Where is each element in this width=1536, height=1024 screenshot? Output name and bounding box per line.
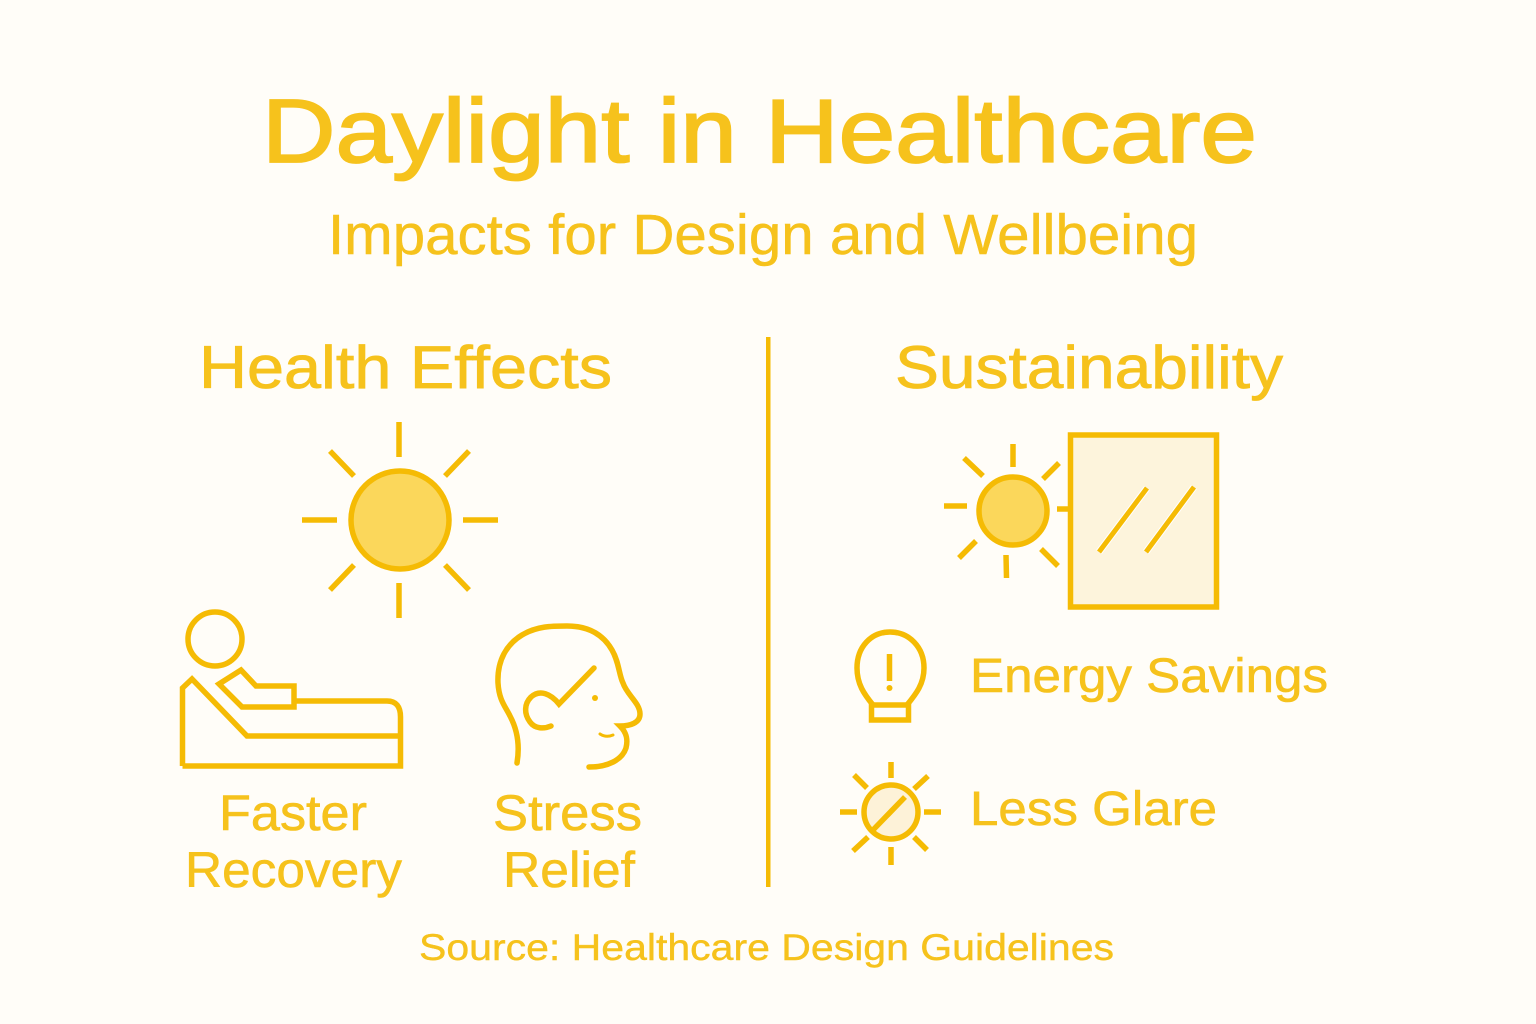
label: Stress Relief bbox=[493, 785, 642, 898]
label: Less Glare: Less Glare bbox=[970, 783, 1217, 836]
label: Stress Relief: Stress bbox=[493, 785, 642, 841]
source note: Source: Healthcare Design Guidelines bbox=[419, 927, 1114, 968]
icon: light bulb bbox=[857, 632, 924, 720]
divider line bbox=[766, 337, 770, 887]
label: Faster Recovery: Faster bbox=[219, 785, 367, 841]
subtitle: Impacts for Design and Wellbeing bbox=[328, 203, 1198, 267]
label: Faster Recovery: Recovery bbox=[185, 842, 402, 898]
icon: patient in bed bbox=[182, 612, 400, 766]
label: Energy Savings: Energy Savings bbox=[970, 650, 1328, 703]
heading: Sustainability: Sustainability bbox=[895, 334, 1283, 401]
icon: head profile bbox=[498, 626, 640, 767]
heading: Health Effects: Health Effects bbox=[199, 334, 612, 401]
label: Faster Recovery bbox=[185, 785, 402, 898]
icon: large sun bbox=[302, 422, 498, 618]
icon: reduced glare sun bbox=[840, 762, 941, 865]
icon: sun beside window bbox=[944, 435, 1216, 607]
window bbox=[1070, 435, 1216, 607]
label: Stress Relief: Relief bbox=[503, 842, 635, 898]
title: Daylight in Healthcare bbox=[262, 82, 1257, 182]
sun bbox=[944, 444, 1070, 578]
